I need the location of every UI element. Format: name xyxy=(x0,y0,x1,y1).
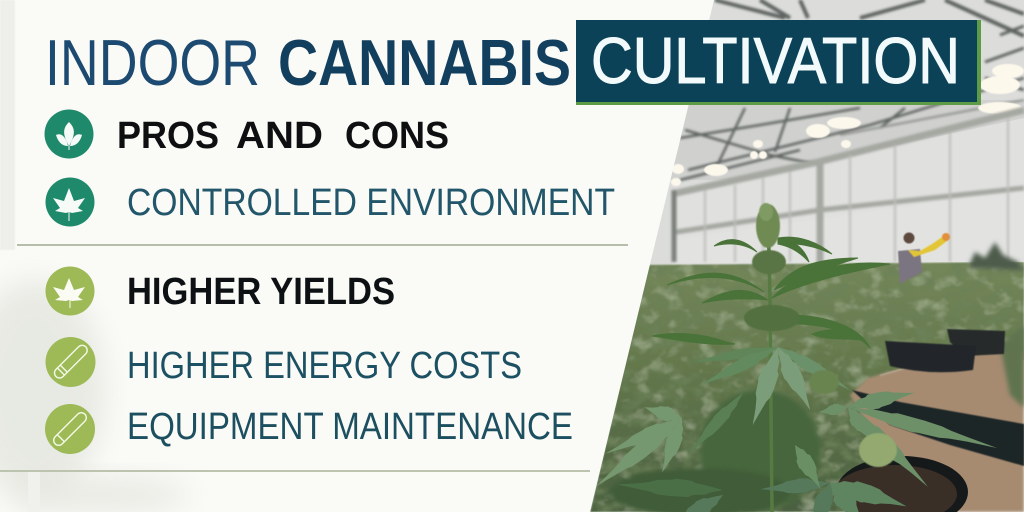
fan leaf: bottom xyxy=(616,441,909,512)
icon: olive tube badge energy xyxy=(46,337,96,387)
lower foliage xyxy=(700,390,820,510)
title: indoor cannabis xyxy=(45,26,571,99)
roof lights xyxy=(671,64,1024,186)
item: equipment maintenance: EQUIPMENT MAINTENANCE xyxy=(127,406,573,448)
title: indoor cannabis: INDOOR xyxy=(45,26,260,99)
item: higher yields: HIGHER YIELDS xyxy=(127,271,395,313)
foliage field xyxy=(590,262,1024,512)
heading: pros and cons xyxy=(117,115,449,157)
background weed xyxy=(968,242,1024,270)
icon: dark green cannabis badge xyxy=(46,178,94,226)
icon: dark green leaf badge xyxy=(44,110,94,158)
icon: olive cannabis badge xyxy=(46,266,94,316)
photo: greenhouse interior xyxy=(590,0,1024,512)
wall framing xyxy=(672,190,1024,265)
soil floor xyxy=(850,352,1024,512)
fan leaf: main centre xyxy=(683,341,853,459)
heading: pros and cons: CONS xyxy=(345,115,449,157)
cannabis plant xyxy=(590,203,999,512)
upper leaves xyxy=(652,237,890,348)
worker xyxy=(898,232,950,284)
buds xyxy=(744,203,897,467)
black trays xyxy=(852,329,1024,466)
title banner: cultivation: CULTIVATION xyxy=(591,24,960,97)
divider: lower xyxy=(0,470,590,472)
title: indoor cannabis: CANNABIS xyxy=(278,26,571,99)
item: controlled environment: CONTROLLED ENVIRONMENT xyxy=(127,182,615,224)
fan leaf: right xyxy=(817,385,999,492)
panel: white slanted text panel xyxy=(0,0,714,512)
item: higher energy costs: HIGHER ENERGY COSTS xyxy=(127,345,522,387)
icon: olive tube badge maintenance xyxy=(45,404,95,454)
round pot xyxy=(833,456,968,512)
faded greenhouse pillar xyxy=(0,0,15,250)
divider: upper xyxy=(17,244,628,246)
heading: pros and cons: AND xyxy=(236,115,323,157)
fan leaf: left xyxy=(590,400,689,493)
roof trusses xyxy=(680,0,1024,180)
heading: pros and cons: PROS xyxy=(117,115,219,157)
